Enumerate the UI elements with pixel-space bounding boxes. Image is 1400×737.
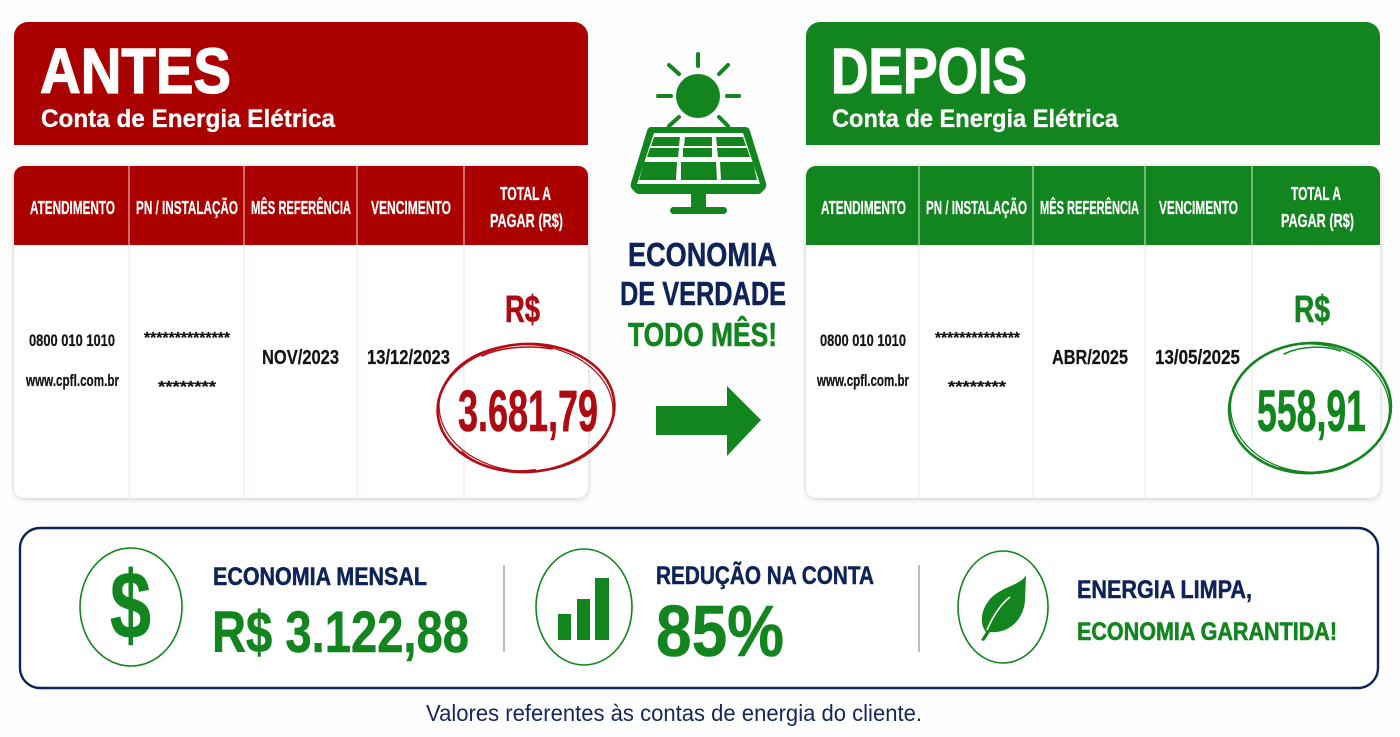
table: antes bill: PAGAR (R$) [490, 211, 563, 231]
icon: leaf [958, 551, 1048, 663]
table: antes bill [14, 166, 598, 498]
heading: economia de verdade: TODO MÊS! [628, 316, 777, 353]
heading: antes banner: ANTES [40, 35, 231, 107]
table: depois bill: ******** [948, 379, 1007, 396]
table: depois bill: 13/05/2025 [1155, 347, 1240, 369]
table: depois bill: PN / INSTALAÇÃO [926, 197, 1027, 218]
text: energia limpa: ECONOMIA GARANTIDA! [1077, 618, 1337, 646]
heading: antes banner: Conta de Energia Elétrica [41, 105, 336, 133]
heading: economia de verdade [620, 236, 786, 353]
text: economia mensal: R$ 3.122,88 [212, 600, 469, 665]
table: depois bill: ABR/2025 [1052, 347, 1128, 369]
icon: sun over solar panel [631, 54, 766, 214]
table: antes bill: R$ [505, 289, 540, 331]
table: antes bill: 13/12/2023 [367, 347, 450, 369]
heading: depois banner [806, 22, 1380, 145]
table: depois bill: ATENDIMENTO [821, 198, 906, 218]
heading: economia de verdade: DE VERDADE [620, 275, 786, 312]
table: antes bill: ATENDIMENTO [30, 198, 115, 218]
table: antes bill: 0800 010 1010 [29, 331, 115, 350]
table: depois bill: www.cpfl.com.br [816, 371, 909, 390]
table: antes bill: ******** [158, 379, 217, 396]
icon: dollar coin: $ [110, 552, 151, 659]
text: reducao na conta: REDUÇÃO NA CONTA [656, 560, 874, 590]
table: depois bill: 0800 010 1010 [820, 331, 906, 350]
table: antes bill: MÊS REFERÊNCIA [251, 197, 351, 218]
panel: centro [620, 54, 786, 456]
table: depois bill: TOTAL A [1291, 184, 1341, 204]
summary frame [20, 528, 1378, 688]
table: antes bill: VENCIMENTO [371, 198, 451, 218]
table: antes bill: PN / INSTALAÇÃO [136, 197, 238, 218]
panel: depois [806, 22, 1395, 498]
text: economia mensal [212, 563, 469, 665]
heading: depois banner: Conta de Energia Elétrica [832, 105, 1119, 133]
footnote: Valores referentes às contas de energia do cliente. [426, 700, 922, 726]
text: reducao na conta: 85% [656, 592, 784, 672]
table: antes bill: 3.681,79 [458, 379, 598, 444]
table: antes bill: www.cpfl.com.br [25, 371, 119, 390]
table: antes bill: ************** [144, 330, 231, 347]
table: depois bill [806, 166, 1380, 498]
icon: dollar coin [80, 548, 182, 666]
callout: antes circled total [434, 339, 618, 477]
table: antes bill: NOV/2023 [262, 347, 339, 369]
panel: resumo da economia [20, 528, 1378, 688]
table: depois bill: ************** [935, 330, 1021, 347]
heading: economia de verdade: ECONOMIA [628, 236, 777, 273]
text: energia limpa [1077, 576, 1337, 646]
text: economia mensal: ECONOMIA MENSAL [213, 563, 427, 591]
table: depois bill: MÊS REFERÊNCIA [1040, 197, 1139, 218]
table: depois bill: VENCIMENTO [1159, 198, 1238, 218]
callout: depois circled total [1225, 338, 1395, 478]
icon: bar chart [536, 549, 632, 665]
panel: antes [14, 22, 618, 498]
text: reducao na conta [656, 560, 874, 672]
table: depois bill: R$ [1294, 289, 1330, 331]
table: antes bill: TOTAL A [500, 184, 551, 204]
heading: depois banner: DEPOIS [831, 35, 1027, 107]
text: energia limpa: ENERGIA LIMPA, [1077, 576, 1252, 604]
table: depois bill: PAGAR (R$) [1281, 211, 1354, 231]
heading: antes banner [14, 22, 588, 145]
arrow: antes para depois [656, 386, 761, 456]
